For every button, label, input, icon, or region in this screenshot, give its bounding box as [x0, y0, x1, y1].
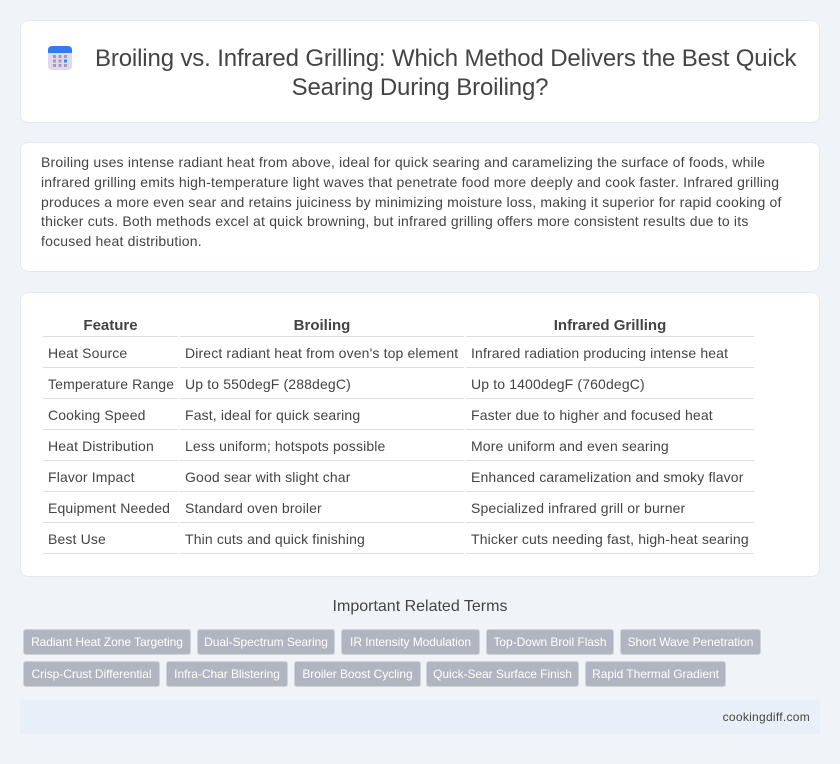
comparison table: Flavor Impact: [48, 469, 135, 485]
comparison table: Standard oven broiler: [185, 500, 322, 516]
comparison table: Equipment Needed: [48, 500, 170, 516]
text block: introduction: Broiling uses intense radiant heat from above, ideal for quick searing and caramelizing the surface of foods, while: [41, 154, 765, 170]
footer: cookingdiff.com: [723, 710, 810, 724]
comparison table: Infrared Grilling: [554, 317, 666, 334]
comparison table: Temperature Range: [48, 376, 174, 392]
comparison table: Good sear with slight char: [185, 469, 350, 485]
tags: related terms: [23, 629, 761, 687]
comparison table: Direct radiant heat from oven's top element: [185, 345, 458, 361]
text block: introduction: thicker cuts. Both methods excel at quick browning, but infrared grilling offers more consistent results due to its: [41, 213, 749, 229]
comparison table: Cooking Speed: [48, 407, 146, 423]
comparison table: Feature: [83, 317, 138, 334]
comparison table: [43, 317, 754, 554]
comparison table: Less uniform; hotspots possible: [185, 438, 385, 454]
panel: table card: [20, 292, 820, 577]
title: Broiling vs. Infrared Grilling: Which Method Delivers the Best Quick: [95, 45, 796, 72]
comparison table: Enhanced caramelization and smoky flavor: [471, 469, 744, 485]
title: Searing During Broiling?: [292, 74, 548, 101]
text block: introduction: [41, 154, 782, 249]
text block: introduction: produces a more even sear and retains juiciness by minimizing moisture loss, making it superior for rapid cooking of: [41, 194, 782, 210]
comparison table: Faster due to higher and focused heat: [471, 407, 713, 423]
comparison table: Heat Distribution: [48, 438, 154, 454]
comparison table: Heat Source: [48, 345, 127, 361]
tags: related terms: Crisp-Crust Differential: [32, 667, 151, 681]
comparison table: Thin cuts and quick finishing: [185, 531, 365, 547]
tags: related terms: Short Wave Penetration: [628, 635, 753, 649]
tags: related terms: Dual-Spectrum Searing: [204, 635, 328, 649]
tags: related terms: Rapid Thermal Gradient: [592, 667, 719, 681]
tags: related terms: Radiant Heat Zone Targeting: [31, 635, 183, 649]
comparison table: Thicker cuts needing fast, high-heat searing: [471, 531, 749, 547]
tags: related terms: Broiler Boost Cycling: [302, 667, 413, 681]
comparison table: More uniform and even searing: [471, 438, 669, 454]
tags: related terms: Quick-Sear Surface Finish: [433, 667, 572, 681]
comparison table: Specialized infrared grill or burner: [471, 500, 685, 516]
text block: introduction: infrared grilling emits high-temperature light waves that penetrate food more deeply and cook faster. Infrared grilling: [41, 174, 779, 190]
comparison table: Best Use: [48, 531, 106, 547]
tags: related terms: IR Intensity Modulation: [350, 635, 471, 649]
comparison table: Broiling: [294, 317, 350, 334]
heading: related terms: Important Related Terms: [333, 598, 507, 615]
comparison table: Fast, ideal for quick searing: [185, 407, 360, 423]
comparison table: Up to 550degF (288degC): [185, 376, 351, 392]
tags: related terms: Top-Down Broil Flash: [493, 635, 607, 649]
text block: introduction: focused heat distribution.: [41, 233, 202, 249]
title: [95, 45, 796, 101]
icon: calendar: [48, 46, 72, 70]
footer: [20, 700, 820, 734]
panel: intro card: [20, 142, 820, 272]
comparison table: Infrared radiation producing intense heat: [471, 345, 728, 361]
tags: related terms: Infra-Char Blistering: [174, 667, 280, 681]
comparison table: Up to 1400degF (760degC): [471, 376, 645, 392]
panel: title card: [20, 20, 820, 123]
